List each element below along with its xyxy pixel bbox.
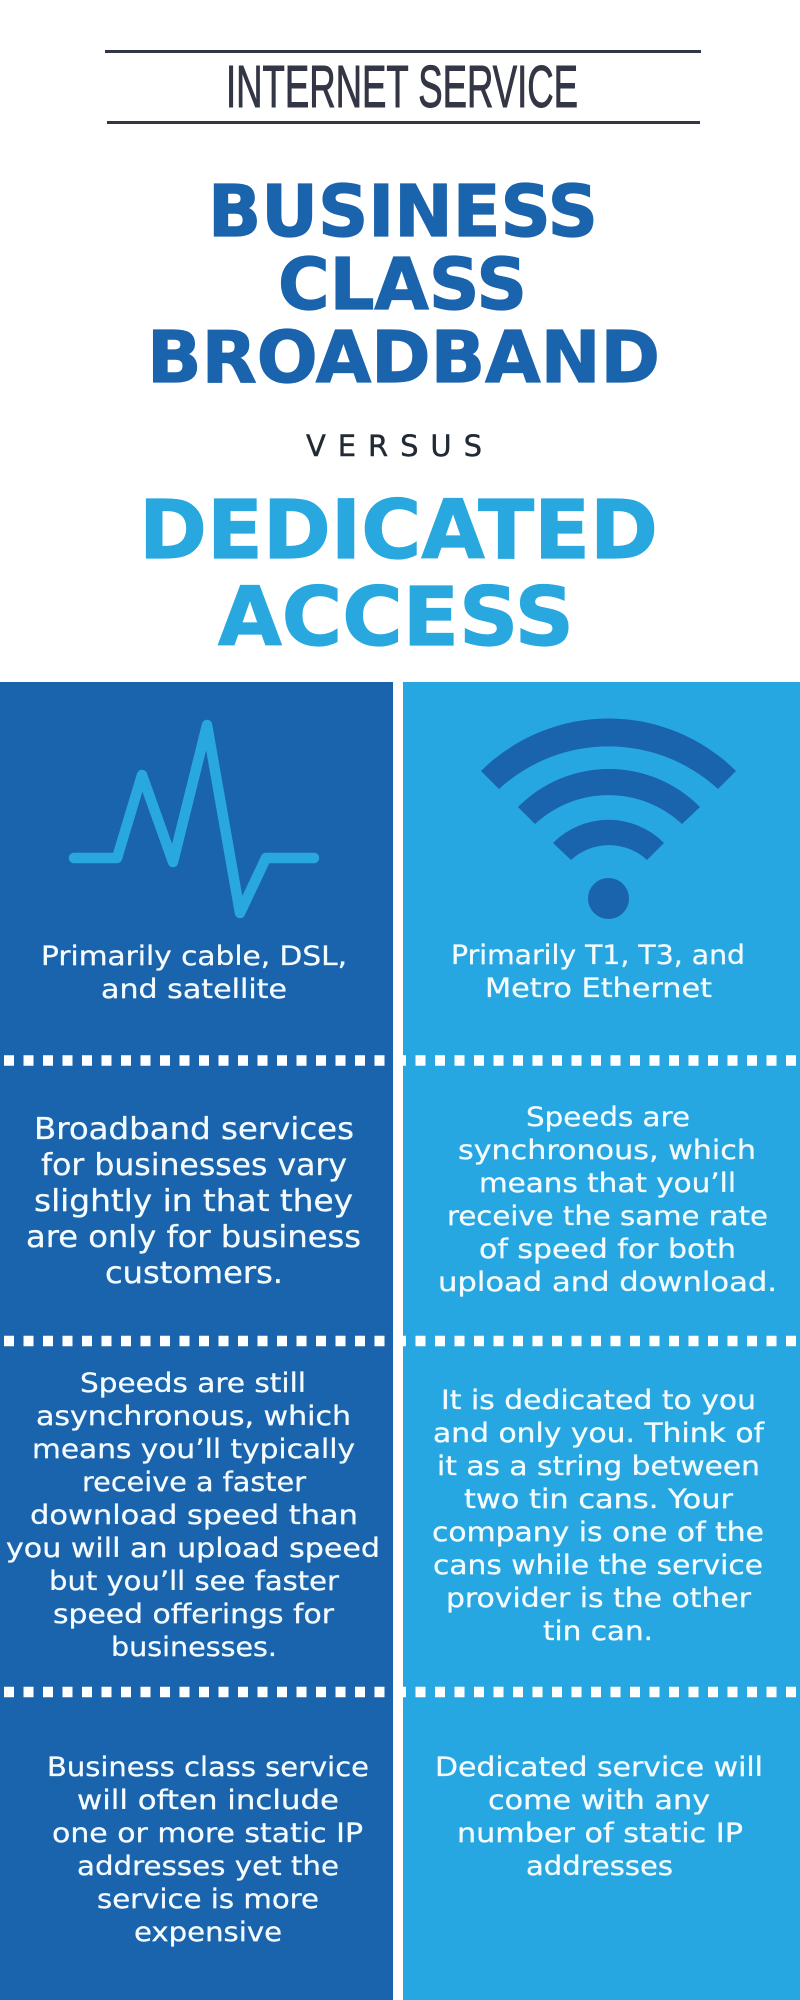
text: broadband for businesses: for businesses vary — [41, 1148, 347, 1183]
text: synchronous speeds: of speed for both — [479, 1234, 736, 1265]
title: dedicated access: ACCESS — [218, 571, 574, 665]
text: asynchronous speeds: receive a faster — [82, 1467, 307, 1498]
text: dedicated static ip: addresses — [526, 1851, 673, 1882]
title: business class broadband: BUSINESS — [208, 170, 598, 253]
text: asynchronous speeds: asynchronous, which — [36, 1401, 351, 1432]
text: dedicated to you: two tin cans. Your — [464, 1484, 734, 1515]
text: synchronous speeds: upload and download. — [438, 1267, 777, 1298]
text: synchronous speeds: synchronous, which — [458, 1135, 756, 1166]
text: broadband technologies — [41, 941, 347, 1005]
text: asynchronous speeds: but you’ll see faster — [49, 1566, 340, 1597]
icon: wifi signal — [481, 718, 736, 919]
text: business static ip: one or more static IP — [52, 1818, 363, 1849]
text: dedicated to you: it as a string between — [437, 1451, 760, 1482]
text: business static ip: addresses yet the — [77, 1851, 339, 1882]
text: synchronous speeds — [438, 1102, 777, 1298]
header: internet service with rules: INTERNET SERVICE — [226, 54, 578, 120]
title: business class broadband — [147, 170, 660, 399]
text: business static ip: Business class service — [47, 1752, 369, 1783]
text: asynchronous speeds: means you’ll typically — [32, 1434, 355, 1465]
text: broadband technologies: and satellite — [101, 974, 287, 1005]
text: synchronous speeds: means that you’ll — [479, 1168, 736, 1199]
text: asynchronous speeds: speed offerings for — [53, 1599, 335, 1630]
text: dedicated static ip: Dedicated service will — [435, 1752, 763, 1783]
title: business class broadband: BROADBAND — [147, 316, 660, 399]
text: broadband for businesses: customers. — [105, 1256, 283, 1291]
text: broadband for businesses: slightly in that they — [34, 1184, 353, 1219]
header: internet service with rules — [105, 50, 701, 124]
text: asynchronous speeds: download speed than — [30, 1500, 358, 1531]
panel: business broadband column — [0, 682, 393, 2000]
text: business static ip — [47, 1752, 369, 1948]
text: broadband for businesses: are only for business — [26, 1220, 361, 1255]
text: broadband for businesses — [26, 1112, 361, 1291]
text: dedicated to you: It is dedicated to you — [441, 1385, 756, 1416]
text: dedicated technologies: Primarily T1, T3, and — [451, 940, 745, 971]
text: dedicated static ip: number of static IP — [457, 1818, 743, 1849]
icon: pulse line — [74, 725, 314, 913]
text: dedicated to you: company is one of the — [432, 1517, 764, 1548]
text: business static ip: expensive — [134, 1917, 282, 1948]
text: dedicated to you — [432, 1385, 766, 1647]
text: business static ip: service is more — [97, 1884, 319, 1915]
text: asynchronous speeds: businesses. — [111, 1632, 277, 1663]
text: business static ip: will often include — [77, 1785, 339, 1816]
text: dedicated static ip: come with any — [488, 1785, 710, 1816]
title: dedicated access — [139, 484, 658, 665]
title: dedicated access: DEDICATED — [139, 484, 658, 578]
text: asynchronous speeds — [6, 1368, 380, 1663]
text: dedicated to you: and only you. Think of — [433, 1418, 766, 1449]
text: dedicated static ip — [435, 1752, 763, 1882]
text: dedicated technologies: Metro Ethernet — [485, 973, 712, 1004]
title: business class broadband: CLASS — [278, 243, 527, 326]
text: dedicated to you: provider is the other — [446, 1583, 752, 1614]
text: synchronous speeds: receive the same rate — [447, 1201, 768, 1232]
text: asynchronous speeds: Speeds are still — [80, 1368, 306, 1399]
text: dedicated to you: tin can. — [543, 1616, 653, 1647]
versus label: VERSUS — [306, 429, 482, 463]
text: broadband technologies: Primarily cable, DSL, — [41, 941, 347, 972]
text: broadband for businesses: Broadband services — [34, 1112, 354, 1147]
text: dedicated technologies — [451, 940, 745, 1004]
panel: dedicated access column — [403, 682, 800, 2000]
text: asynchronous speeds: you will an upload speed — [6, 1533, 380, 1564]
text: dedicated to you: cans while the service — [433, 1550, 763, 1581]
text: synchronous speeds: Speeds are — [526, 1102, 690, 1133]
